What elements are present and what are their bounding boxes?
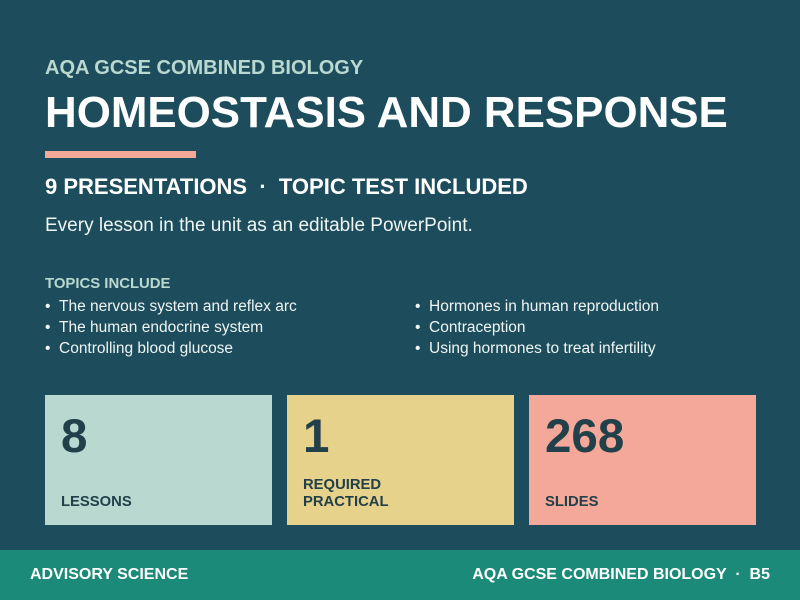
stat card: slides — [529, 395, 756, 525]
title: HOMEOSTASIS AND RESPONSE — [45, 88, 728, 137]
footer course reference: AQA GCSE COMBINED BIOLOGY · B5 — [472, 566, 770, 583]
subheading: 9 PRESENTATIONS · TOPIC TEST INCLUDED — [45, 174, 528, 199]
topics list: left column: The nervous system and reflex arc — [59, 298, 297, 315]
stat card: required practical: PRACTICAL — [303, 494, 388, 510]
topics list: left column: Controlling blood glucose — [59, 340, 233, 357]
topics list: left column: • — [45, 298, 50, 315]
topics list: right column: • — [415, 319, 420, 336]
topics list: left column: • — [45, 319, 50, 336]
topics list: right column — [415, 298, 659, 357]
topics list: right column: Contraception — [429, 319, 526, 336]
stat card: slides: SLIDES — [545, 494, 598, 510]
footer band — [0, 550, 800, 600]
topics heading: TOPICS INCLUDE — [45, 276, 170, 292]
stat card: required practical — [287, 395, 514, 525]
topics list: right column: Using hormones to treat infertility — [429, 340, 656, 357]
description: Every lesson in the unit as an editable PowerPoint. — [45, 215, 473, 236]
topics list: left column — [45, 298, 297, 357]
stat card: lessons: 8 — [61, 410, 87, 463]
stat card: lessons: LESSONS — [61, 494, 132, 510]
stat card: slides: 268 — [545, 410, 624, 463]
topics list: left column: The human endocrine system — [59, 319, 263, 336]
topics list: right column: • — [415, 298, 420, 315]
stat card: required practical: REQUIRED — [303, 476, 381, 492]
eyebrow heading: AQA GCSE COMBINED BIOLOGY — [45, 57, 363, 79]
topics list: left column: • — [45, 340, 50, 357]
topics list: right column: Hormones in human reproduction — [429, 298, 659, 315]
stat card: required practical: 1 — [303, 410, 329, 463]
footer brand: ADVISORY SCIENCE — [30, 566, 188, 583]
accent bar — [45, 151, 196, 158]
stat card: lessons — [45, 395, 272, 525]
topics list: right column: • — [415, 340, 420, 357]
